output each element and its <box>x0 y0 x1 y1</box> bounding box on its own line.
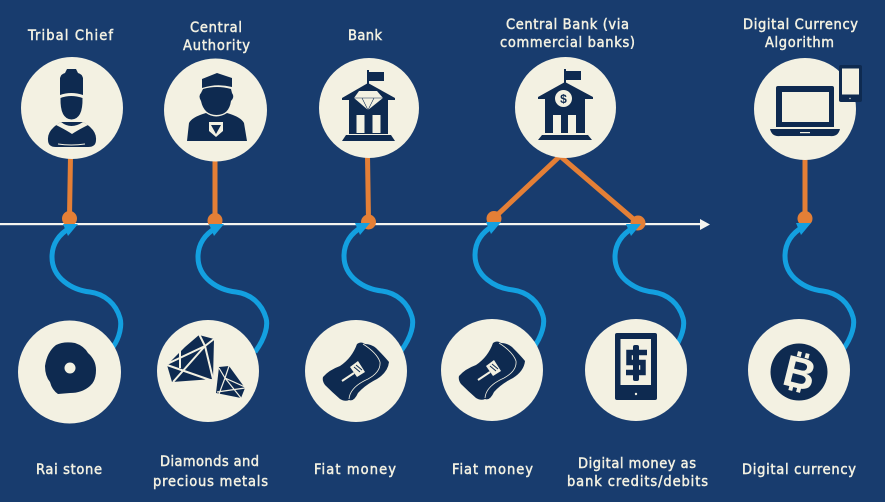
heading: Digital Currency Algorithm <box>743 17 858 51</box>
blue curve: Digital currency <box>785 223 854 351</box>
circle: Bank icon <box>319 58 419 158</box>
circle: Central Authority icon <box>164 58 267 162</box>
blue curve: Digital money <box>615 224 684 352</box>
circle: Bitcoin icon: B <box>778 346 821 401</box>
label: Digital money as bank credits/debits: Digital money as <box>578 456 696 472</box>
circle: Fiat money icon <box>305 320 407 422</box>
circle: Bitcoin icon <box>748 319 850 421</box>
orange connectors <box>62 156 812 230</box>
label: Diamonds and precious metals: Diamonds and <box>160 454 259 470</box>
label: Digital money as bank credits/debits <box>567 456 708 490</box>
blue curve: Fiat money 2 <box>475 222 544 350</box>
label: Rai stone: Rai stone <box>36 462 102 478</box>
circle: Rai stone icon <box>18 320 121 424</box>
heading: Tribal Chief: Tribal Chief <box>27 28 113 44</box>
circle: Diamonds icon <box>157 320 259 422</box>
label: Diamonds and precious metals: precious metals <box>153 474 268 490</box>
heading: Central Authority: Authority <box>183 38 250 54</box>
circle: Central Bank icon: $ <box>560 92 567 106</box>
heading: Central Bank via commercial banks: Central Bank (via <box>506 17 629 33</box>
label: Fiat money: Fiat money <box>314 462 396 478</box>
blue curve: Fiat money <box>344 223 413 351</box>
circle: Central Bank icon <box>515 57 616 158</box>
heading: Bank: Bank <box>348 28 382 44</box>
heading: Central Authority: Central <box>190 20 242 36</box>
label: Diamonds and precious metals <box>153 454 268 490</box>
blue curve: Rai stone <box>52 224 121 347</box>
label: Fiat money 2: Fiat money <box>452 462 533 478</box>
circle: Fiat money 2 icon <box>441 319 543 421</box>
heading: Central Bank via commercial banks: commercial banks) <box>500 35 635 51</box>
circle: Digital Currency Algorithm icon <box>754 58 862 160</box>
heading: Digital Currency Algorithm: Digital Currency <box>743 17 858 33</box>
label: Digital money as bank credits/debits: bank credits/debits <box>567 474 708 490</box>
heading: Central Bank via commercial banks <box>500 17 635 51</box>
timeline arrow <box>0 219 710 230</box>
heading: Digital Currency Algorithm: Algorithm <box>765 35 834 51</box>
circle: Tribal Chief icon <box>21 57 123 159</box>
heading: Central Authority <box>183 20 250 54</box>
label: Digital currency: Digital currency <box>742 462 856 478</box>
circle: Digital money icon <box>585 319 687 421</box>
blue curve: Diamonds <box>198 224 267 352</box>
